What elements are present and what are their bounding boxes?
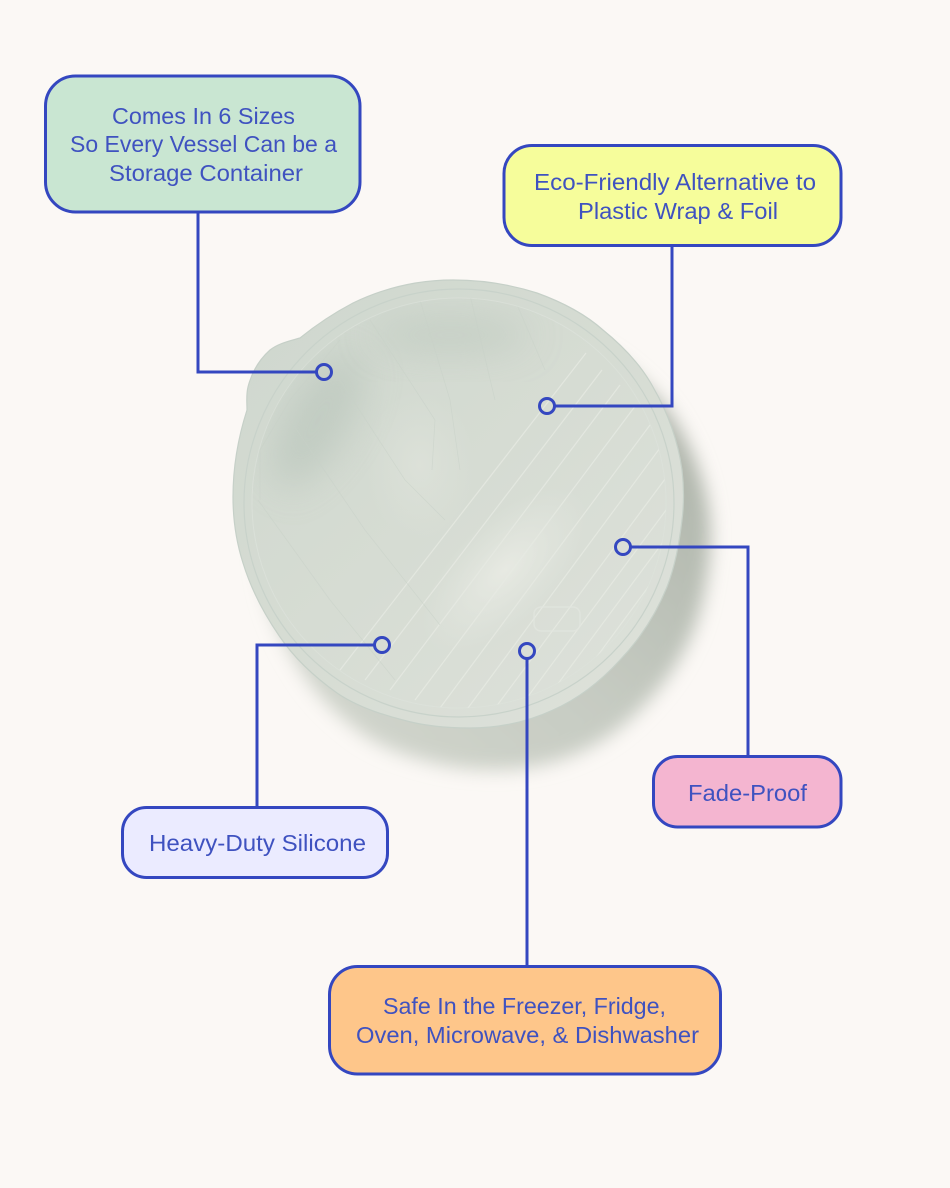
connector: eco-friendly [540, 245, 672, 414]
connector: fade-proof [616, 540, 748, 756]
connector: sizes [198, 212, 332, 380]
connector: safe in [520, 644, 534, 966]
lid rim ring [244, 289, 674, 717]
callout: sizes: Storage Container [109, 160, 303, 186]
callout: eco-friendly [504, 146, 841, 246]
callout: fade-proof [654, 756, 841, 827]
infographic: silicone lid features [44, 74, 842, 1076]
callout: safe in [330, 966, 720, 1074]
lid shading [273, 322, 538, 603]
callout: safe in: Safe In the Freezer, Fridge, [383, 993, 666, 1019]
embossed logo mark [534, 607, 580, 631]
callout: heavy-duty silicone [122, 808, 388, 878]
callout: sizes: Comes In 6 Sizes [112, 103, 295, 129]
connector: heavy-duty [257, 638, 390, 807]
callout: heavy-duty silicone: Heavy-Duty Silicone [149, 830, 366, 856]
silicone lid [233, 280, 684, 728]
upper-left chevron ribs [329, 413, 460, 680]
callout: fade-proof: Fade-Proof [688, 780, 808, 806]
diagonal ribs [340, 353, 672, 715]
callout: sizes: So Every Vessel Can be a [70, 131, 337, 157]
callout: safe in: Oven, Microwave, & Dishwasher [356, 1022, 699, 1048]
drop shadow under lid [260, 322, 710, 770]
callout: eco-friendly: Plastic Wrap & Foil [578, 198, 778, 224]
callout: sizes [46, 76, 360, 212]
callout: eco-friendly: Eco-Friendly Alternative to [534, 169, 816, 195]
